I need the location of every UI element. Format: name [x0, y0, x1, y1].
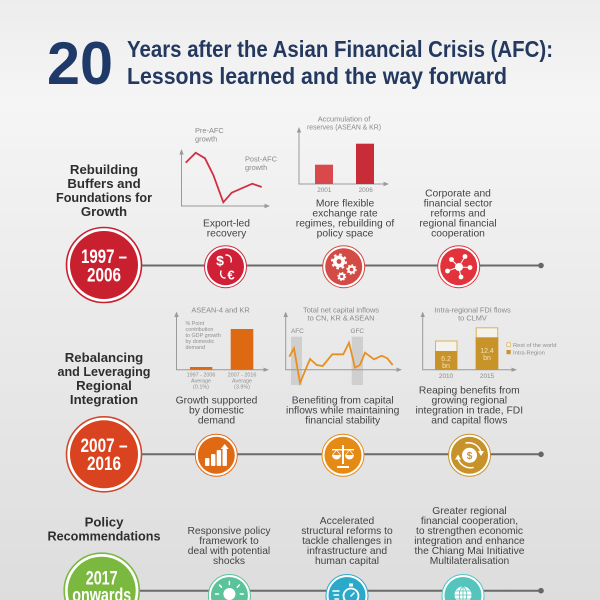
text: exchange rate regimes: policy space	[317, 229, 374, 240]
period badge: 2017 onwards	[64, 553, 139, 600]
heading: rebalancing: Regional	[76, 378, 132, 393]
text: domestic demand: demand	[198, 416, 235, 427]
text: exchange rate regimes: regimes, rebuilding of	[296, 219, 394, 230]
text: structural reforms	[301, 516, 393, 567]
chart: capital inflows line	[284, 306, 402, 385]
text: structural reforms: tackle challenges in	[302, 536, 392, 547]
chart: intra-regional FDI bars	[420, 306, 556, 380]
chart: domestic demand bars: demand	[186, 345, 205, 351]
text: regional cooperation	[414, 506, 525, 567]
period badge: 1997-2006: 2006	[87, 266, 121, 286]
chart: export-led growth line: growth	[245, 163, 267, 172]
chart: accumulation of reserves: 2001	[317, 187, 332, 194]
text: capital inflows	[286, 396, 400, 427]
period badge: 2007-2016: 2007 –	[80, 436, 128, 457]
text: corporate reforms: financial sector	[424, 199, 493, 210]
chart: export-led growth line: Pre-AFC	[195, 126, 224, 135]
heading: rebuilding buffers: Foundations for	[56, 190, 152, 205]
text: responsive policy: Responsive policy	[188, 526, 271, 537]
chart: accumulation of reserves: reserves (ASEAN & KR)	[307, 122, 381, 132]
text: exchange rate regimes: exchange rate	[312, 209, 378, 220]
text: export-led recovery	[203, 218, 250, 240]
chart: domestic demand bars: (0.1%)	[193, 384, 209, 390]
text: responsive policy: framework to	[199, 536, 259, 547]
text: corporate reforms: regional financial	[419, 219, 497, 230]
text: responsive policy: shocks	[213, 556, 245, 567]
text: structural reforms: Accelerated	[320, 516, 374, 527]
title	[47, 30, 553, 97]
icon: currency exchange: $	[216, 252, 224, 268]
icon: currency exchange	[204, 246, 246, 288]
chart: accumulation of reserves: 2006	[359, 187, 373, 194]
chart: domestic demand bars: ASEAN-4 and KR	[191, 306, 250, 315]
chart: domestic demand bars: 2007 - 2016	[228, 372, 256, 378]
chart: capital inflows line: to CN, KR & ASEAN	[308, 314, 374, 323]
text: responsive policy: deal with potential	[188, 546, 270, 557]
heading: policy recommendations	[48, 514, 160, 544]
text: regional cooperation: Greater regional	[432, 506, 507, 517]
chart: intra-regional FDI bars: bn	[442, 363, 450, 370]
text: export-led recovery: recovery	[207, 229, 247, 240]
chart: export-led growth line: Post-AFC	[245, 154, 278, 164]
text: corporate reforms: reforms and	[431, 209, 486, 220]
chart: intra-regional FDI bars: to CLMV	[458, 314, 487, 323]
timeline 2	[140, 452, 544, 457]
text: domestic demand	[176, 396, 258, 427]
chart: domestic demand bars: to GDP growth	[186, 333, 221, 339]
heading: rebuilding buffers	[56, 162, 152, 219]
icon: balance scale	[322, 434, 364, 476]
period badge: 2007-2016	[66, 417, 142, 492]
timeline 1	[140, 263, 544, 268]
text: domestic demand: by domestic	[189, 406, 244, 417]
timeline 3	[138, 588, 544, 594]
icon: light bulb	[208, 574, 250, 600]
heading: rebuilding buffers: Buffers and	[67, 176, 141, 191]
text: structural reforms: human capital	[315, 556, 379, 567]
chart: export-led growth line: growth	[195, 134, 217, 144]
heading: rebalancing: and Leveraging	[58, 364, 150, 379]
heading: rebuilding buffers: Rebuilding	[70, 162, 138, 177]
text: export-led recovery: Export-led	[203, 218, 250, 230]
text: regional cooperation: to strengthen economic	[416, 526, 523, 537]
chart: export-led growth line	[179, 126, 278, 208]
text: capital inflows: inflows while maintaining	[286, 406, 400, 417]
period badge: 1997-2006	[66, 228, 142, 302]
text: regional integration: integration in trade, FDI	[415, 406, 523, 417]
title: 20	[47, 30, 113, 97]
title: Lessons learned and the way forward	[127, 63, 507, 89]
text: corporate reforms	[419, 189, 497, 240]
icon: globe	[442, 574, 484, 600]
text: corporate reforms: cooperation	[431, 229, 485, 240]
text: exchange rate regimes: More flexible	[316, 199, 374, 210]
text: responsive policy	[188, 526, 271, 567]
chart: intra-regional FDI bars: Intra-Region	[513, 350, 545, 356]
chart: domestic demand bars: Average	[191, 378, 211, 384]
heading: rebuilding buffers: Growth	[81, 204, 127, 219]
icon: circulating dollar: $	[467, 451, 473, 462]
chart: domestic demand bars: 1997 - 2006	[187, 372, 215, 378]
text: regional cooperation: the Chiang Mai Initiative	[415, 546, 525, 557]
text: regional cooperation: Multilateralisation	[430, 556, 510, 567]
text: regional integration: growing regional	[432, 396, 507, 407]
chart: intra-regional FDI bars: Intra-regional FDI flows	[434, 306, 511, 315]
chart: capital inflows line: GFC	[351, 328, 364, 335]
text: capital inflows: Benefiting from capital	[292, 396, 394, 407]
chart: intra-regional FDI bars: 6.2	[441, 356, 451, 363]
text: regional integration: Reaping benefits from	[419, 386, 520, 397]
icon: currency exchange: €	[227, 268, 235, 282]
icon: rising bars	[195, 434, 237, 476]
text: regional cooperation: financial cooperation,	[421, 516, 518, 527]
text: corporate reforms: Corporate and	[425, 189, 491, 200]
chart: intra-regional FDI bars: 2010	[439, 373, 454, 380]
icon: circulating dollar	[448, 434, 490, 476]
text: domestic demand: Growth supported	[176, 396, 258, 407]
chart: accumulation of reserves: Accumulation of	[318, 114, 371, 124]
period badge: 2017 onwards: 2017	[86, 568, 118, 590]
chart: accumulation of reserves	[297, 114, 389, 194]
chart: capital inflows line: AFC	[291, 328, 304, 335]
chart: intra-regional FDI bars: bn	[483, 355, 491, 362]
icon: gears	[323, 246, 365, 288]
chart: capital inflows line: Total net capital inflows	[303, 306, 379, 315]
heading: policy recommendations: Policy	[85, 514, 124, 530]
chart: intra-regional FDI bars: Rest of the world	[513, 343, 556, 349]
chart: domestic demand bars: by domestic	[186, 339, 215, 345]
text: regional integration: and capital flows	[431, 416, 507, 427]
text: structural reforms: structural reforms to	[301, 526, 393, 537]
text: capital inflows: financial stability	[305, 416, 381, 427]
text: exchange rate regimes	[296, 199, 394, 240]
icon: stopwatch	[326, 574, 368, 600]
chart: domestic demand bars: contribution	[186, 327, 213, 333]
chart: domestic demand bars: (3.9%)	[234, 384, 250, 390]
icon: network hub	[438, 246, 480, 288]
heading: policy recommendations: Recommendations	[48, 528, 160, 544]
chart: intra-regional FDI bars: 12.4	[480, 348, 494, 355]
chart: domestic demand bars: % Point	[186, 321, 205, 327]
heading: rebalancing	[58, 350, 150, 407]
period badge: 2007-2016: 2016	[87, 454, 121, 475]
period badge: 1997-2006: 1997 –	[81, 247, 127, 268]
text: structural reforms: infrastructure and	[307, 546, 387, 557]
heading: rebalancing: Rebalancing	[65, 350, 143, 365]
text: regional integration	[415, 386, 523, 427]
text: regional cooperation: integration and enhance	[414, 536, 525, 547]
chart: domestic demand bars	[174, 306, 269, 390]
chart: domestic demand bars: Average	[232, 378, 252, 384]
heading: rebalancing: Integration	[70, 392, 138, 407]
chart: intra-regional FDI bars: 2015	[480, 373, 495, 380]
